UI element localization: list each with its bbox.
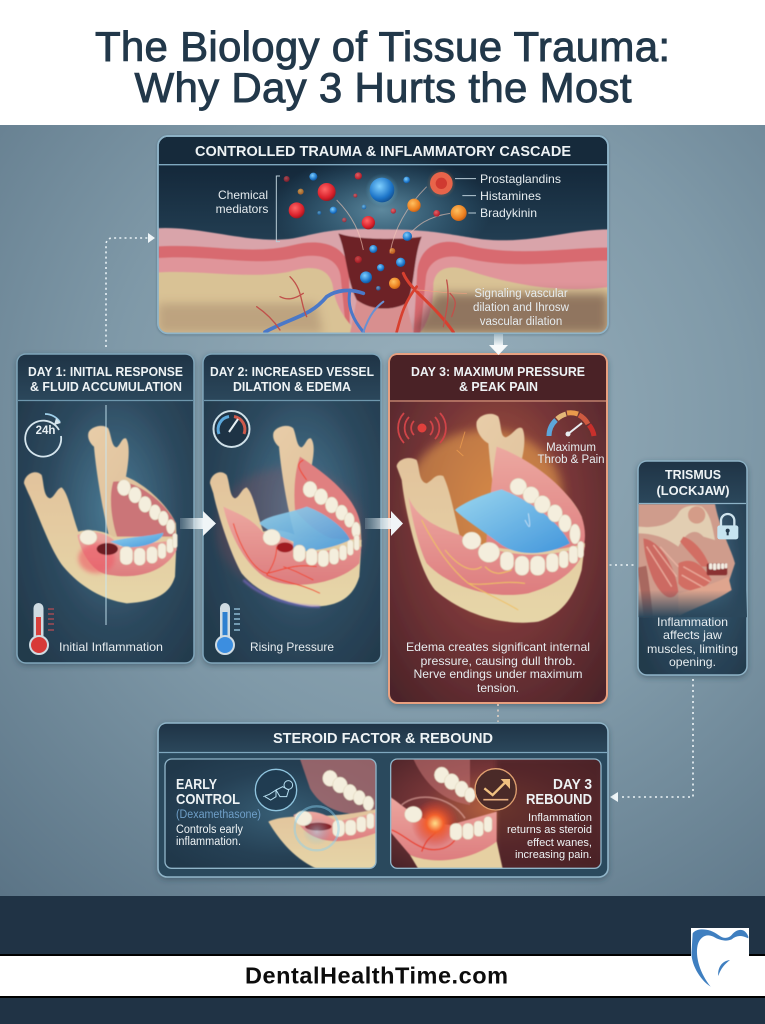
label: chemical mediators: mediators — [216, 202, 268, 216]
text: day 3 description: Nerve endings under maximum — [414, 667, 582, 681]
logo: tooth — [691, 928, 749, 990]
text: day 3 description: Edema creates significant internal — [406, 640, 590, 654]
heading: day 3: DAY 3: MAXIMUM PRESSURE — [411, 364, 585, 379]
icon: 24h clock: 24h — [36, 425, 55, 437]
label: signaling: vascular dilation — [480, 316, 562, 328]
label: maximum throb and pain: Throb & Pain — [537, 454, 605, 466]
title: Why Day 3 Hurts the Most — [134, 64, 632, 111]
text: day 3 description — [406, 640, 590, 695]
text: day 3 rebound: increasing pain. — [515, 849, 592, 861]
heading: trismus: (LOCKJAW) — [656, 483, 730, 498]
sub-panel: day 3 rebound — [387, 759, 601, 872]
dotted connector: trismus to rebound — [610, 679, 693, 802]
labels: mediators: Bradykinin — [480, 206, 537, 220]
arrow: day 2 to day 3 — [365, 511, 403, 536]
heading: cascade: CONTROLLED TRAUMA & INFLAMMATORY CASCADE — [195, 144, 571, 160]
heading: day 2: DAY 2: INCREASED VESSEL — [210, 364, 374, 379]
heading: trismus: TRISMUS — [665, 467, 721, 482]
bracket and leader lines — [276, 176, 476, 242]
text: trismus description: affects jaw — [663, 628, 722, 642]
icon: rebound chart — [475, 769, 516, 810]
labels: mediators: Prostaglandins — [480, 172, 561, 186]
text: early control: inflammation. — [176, 836, 241, 848]
dotted connector: day 1 to cascade — [106, 233, 155, 347]
website url: DentalHealthTime.com — [245, 962, 508, 988]
icon: gauge — [214, 411, 250, 447]
text: early control — [176, 776, 261, 848]
label: signaling: Signaling vascular — [474, 288, 568, 300]
label: maximum throb and pain: Maximum — [546, 442, 596, 454]
icon: thermometer red — [30, 603, 54, 654]
labels: mediators: Histamines — [480, 189, 541, 203]
label: chemical mediators: Chemical — [218, 188, 268, 202]
heading: day 1: & FLUID ACCUMULATION — [30, 379, 182, 394]
panel: day 1 — [17, 354, 194, 663]
sub-panel: early control — [165, 759, 380, 872]
icon: 24h clock — [25, 414, 61, 457]
panel: day 2 — [203, 354, 381, 663]
illustration: day 2 jaw — [210, 426, 363, 607]
illustration: day 3 jaw — [397, 414, 585, 623]
label: chemical mediators — [216, 188, 268, 216]
title — [95, 23, 670, 111]
text: day 3 rebound: returns as steroid — [507, 824, 592, 836]
labels: mediators — [480, 172, 561, 220]
text: early control: EARLY — [176, 776, 217, 793]
heading: steroid: STEROID FACTOR & REBOUND — [273, 730, 493, 747]
heading: trismus — [656, 467, 730, 498]
label: signaling: dilation and Ihrosw — [473, 302, 570, 314]
text: early control: (Dexamethasone) — [176, 809, 261, 821]
dotted connector: day 3 to trismus — [597, 562, 637, 568]
text: day 3 rebound: REBOUND — [526, 791, 592, 808]
panel: day 3 — [389, 354, 607, 703]
footer band — [0, 896, 765, 1024]
text: day 3 rebound: DAY 3 — [553, 776, 592, 793]
label: rising pressure: Rising Pressure — [250, 640, 334, 654]
title: The Biology of Tissue Trauma: — [95, 23, 670, 70]
text: day 3 rebound: effect wanes, — [527, 837, 592, 849]
text: day 3 description: tension. — [477, 681, 519, 695]
molecules — [284, 169, 467, 291]
vessels — [257, 273, 467, 332]
text: trismus description: opening. — [669, 655, 716, 669]
heading: day 3 — [411, 364, 585, 394]
heading: day 1: DAY 1: INITIAL RESPONSE — [28, 364, 183, 379]
text: day 3 rebound — [507, 776, 592, 861]
text: day 3 description: pressure, causing dull throb. — [420, 654, 576, 668]
text: trismus description: Inflammation — [657, 615, 728, 629]
icon: pain gauge — [549, 413, 594, 436]
arrow: day 1 to day 2 — [180, 511, 216, 536]
illustration: day 1 jaw — [24, 426, 177, 603]
heading: day 2 — [210, 364, 374, 394]
text: trismus description — [647, 615, 738, 669]
illustration: jaw muscles — [638, 504, 747, 617]
icon: thermometer blue — [216, 603, 240, 654]
panel: steroid factor and rebound — [158, 723, 608, 877]
icon: padlock — [717, 514, 738, 539]
text: trismus description: muscles, limiting — [647, 642, 738, 656]
icon: pulsing pain signal — [398, 413, 446, 443]
heading: day 1 — [28, 364, 183, 394]
heading: day 2: DILATION & EDEMA — [233, 379, 352, 394]
text: early control: Controls early — [176, 824, 243, 836]
text: day 3 rebound: Inflammation — [528, 812, 592, 824]
label: signaling — [473, 288, 570, 328]
tissue layers — [155, 228, 611, 337]
panel: trismus — [638, 461, 747, 675]
background — [0, 125, 765, 896]
icon: molecule — [255, 769, 297, 811]
label: maximum throb and pain — [537, 442, 605, 466]
heading: day 3: & PEAK PAIN — [459, 379, 538, 394]
arrow: cascade to day 3 — [489, 334, 508, 355]
panel: controlled trauma and inflammatory cascade — [155, 136, 611, 337]
text: early control: CONTROL — [176, 791, 240, 808]
label: initial inflammation: Initial Inflammation — [59, 640, 163, 654]
dotted connector: day 3 to steroid — [497, 704, 499, 722]
